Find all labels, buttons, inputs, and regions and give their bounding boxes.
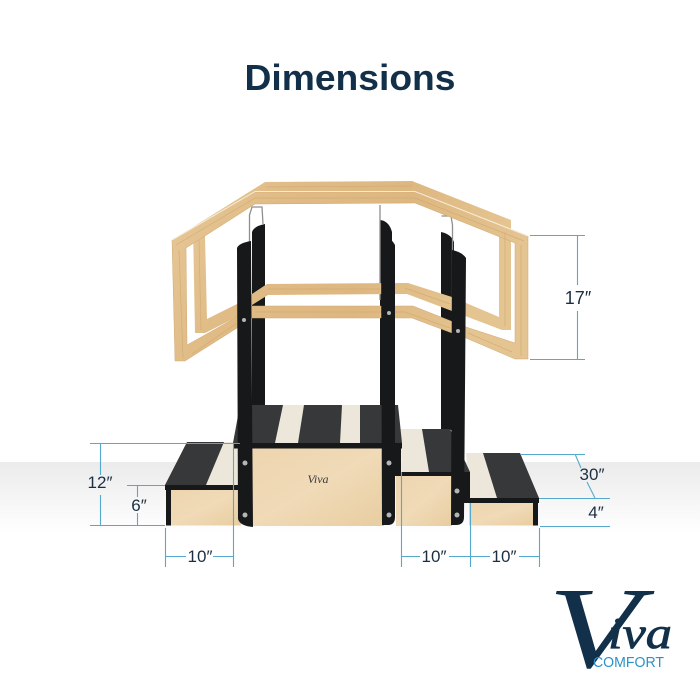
dimension labels: 4″: [588, 503, 604, 522]
back handrail: [193, 181, 511, 333]
low right step: [466, 453, 539, 526]
brand logo: V: [548, 565, 656, 693]
dimension labels: 6″: [131, 496, 147, 515]
front handrail: [172, 192, 528, 361]
dimension labels: 10″: [492, 547, 516, 566]
front black posts: [237, 235, 466, 527]
rail highlight: [172, 192, 528, 240]
dimension labels: 17″: [565, 288, 592, 308]
brand logo: iva: [608, 609, 672, 658]
floor band: [0, 462, 700, 534]
screws: [242, 311, 460, 518]
dimension labels: 30″: [580, 465, 604, 484]
top centre step: [233, 405, 402, 526]
box logo: Viva: [307, 472, 329, 486]
middle right step: [396, 429, 470, 526]
brand logo: COMFORT: [593, 655, 664, 671]
support wires: [250, 205, 452, 310]
left step: [165, 442, 241, 526]
back black posts: [252, 220, 454, 430]
dimension labels: 10″: [422, 547, 446, 566]
dimension labels: [88, 288, 604, 566]
dimension lines: [90, 235, 610, 567]
title: Dimensions: [244, 57, 456, 98]
brand logo: [548, 565, 672, 693]
rail grain: [176, 186, 524, 358]
dimension labels: 10″: [188, 547, 212, 566]
dimension labels: 12″: [88, 473, 112, 492]
product: step unit with handrails: [165, 181, 539, 527]
